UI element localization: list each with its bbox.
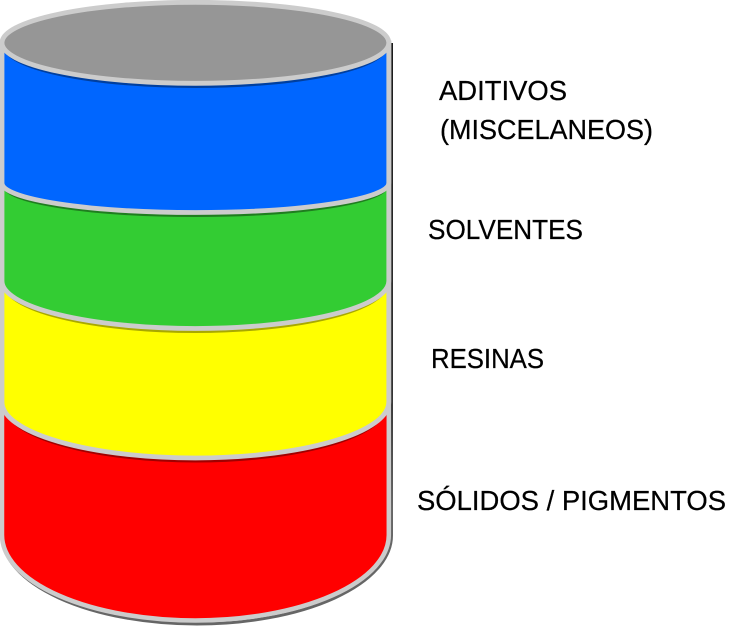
layer: yellow resins [2, 43, 389, 458]
layer: green solvents [2, 43, 389, 328]
outer shadow [2, 43, 391, 624]
label: aditivos [439, 75, 653, 145]
layer: blue additives [2, 43, 389, 212]
layer shadow: yellow [4, 284, 386, 332]
top rim shadow [4, 46, 386, 86]
label: solventes: SOLVENTES [428, 214, 583, 245]
layer: red solids [2, 43, 389, 620]
layer shadow: green [4, 186, 386, 216]
label: aditivos: (MISCELANEOS) [440, 114, 653, 145]
layer shadow: red [4, 405, 386, 461]
cylinder [2, 2, 392, 624]
cylinder top [2, 2, 389, 83]
label: solidos / pigmentos: SÓLIDOS / PIGMENTOS [417, 485, 726, 516]
label: resinas: RESINAS [431, 343, 544, 374]
label: aditivos: ADITIVOS [439, 75, 567, 106]
